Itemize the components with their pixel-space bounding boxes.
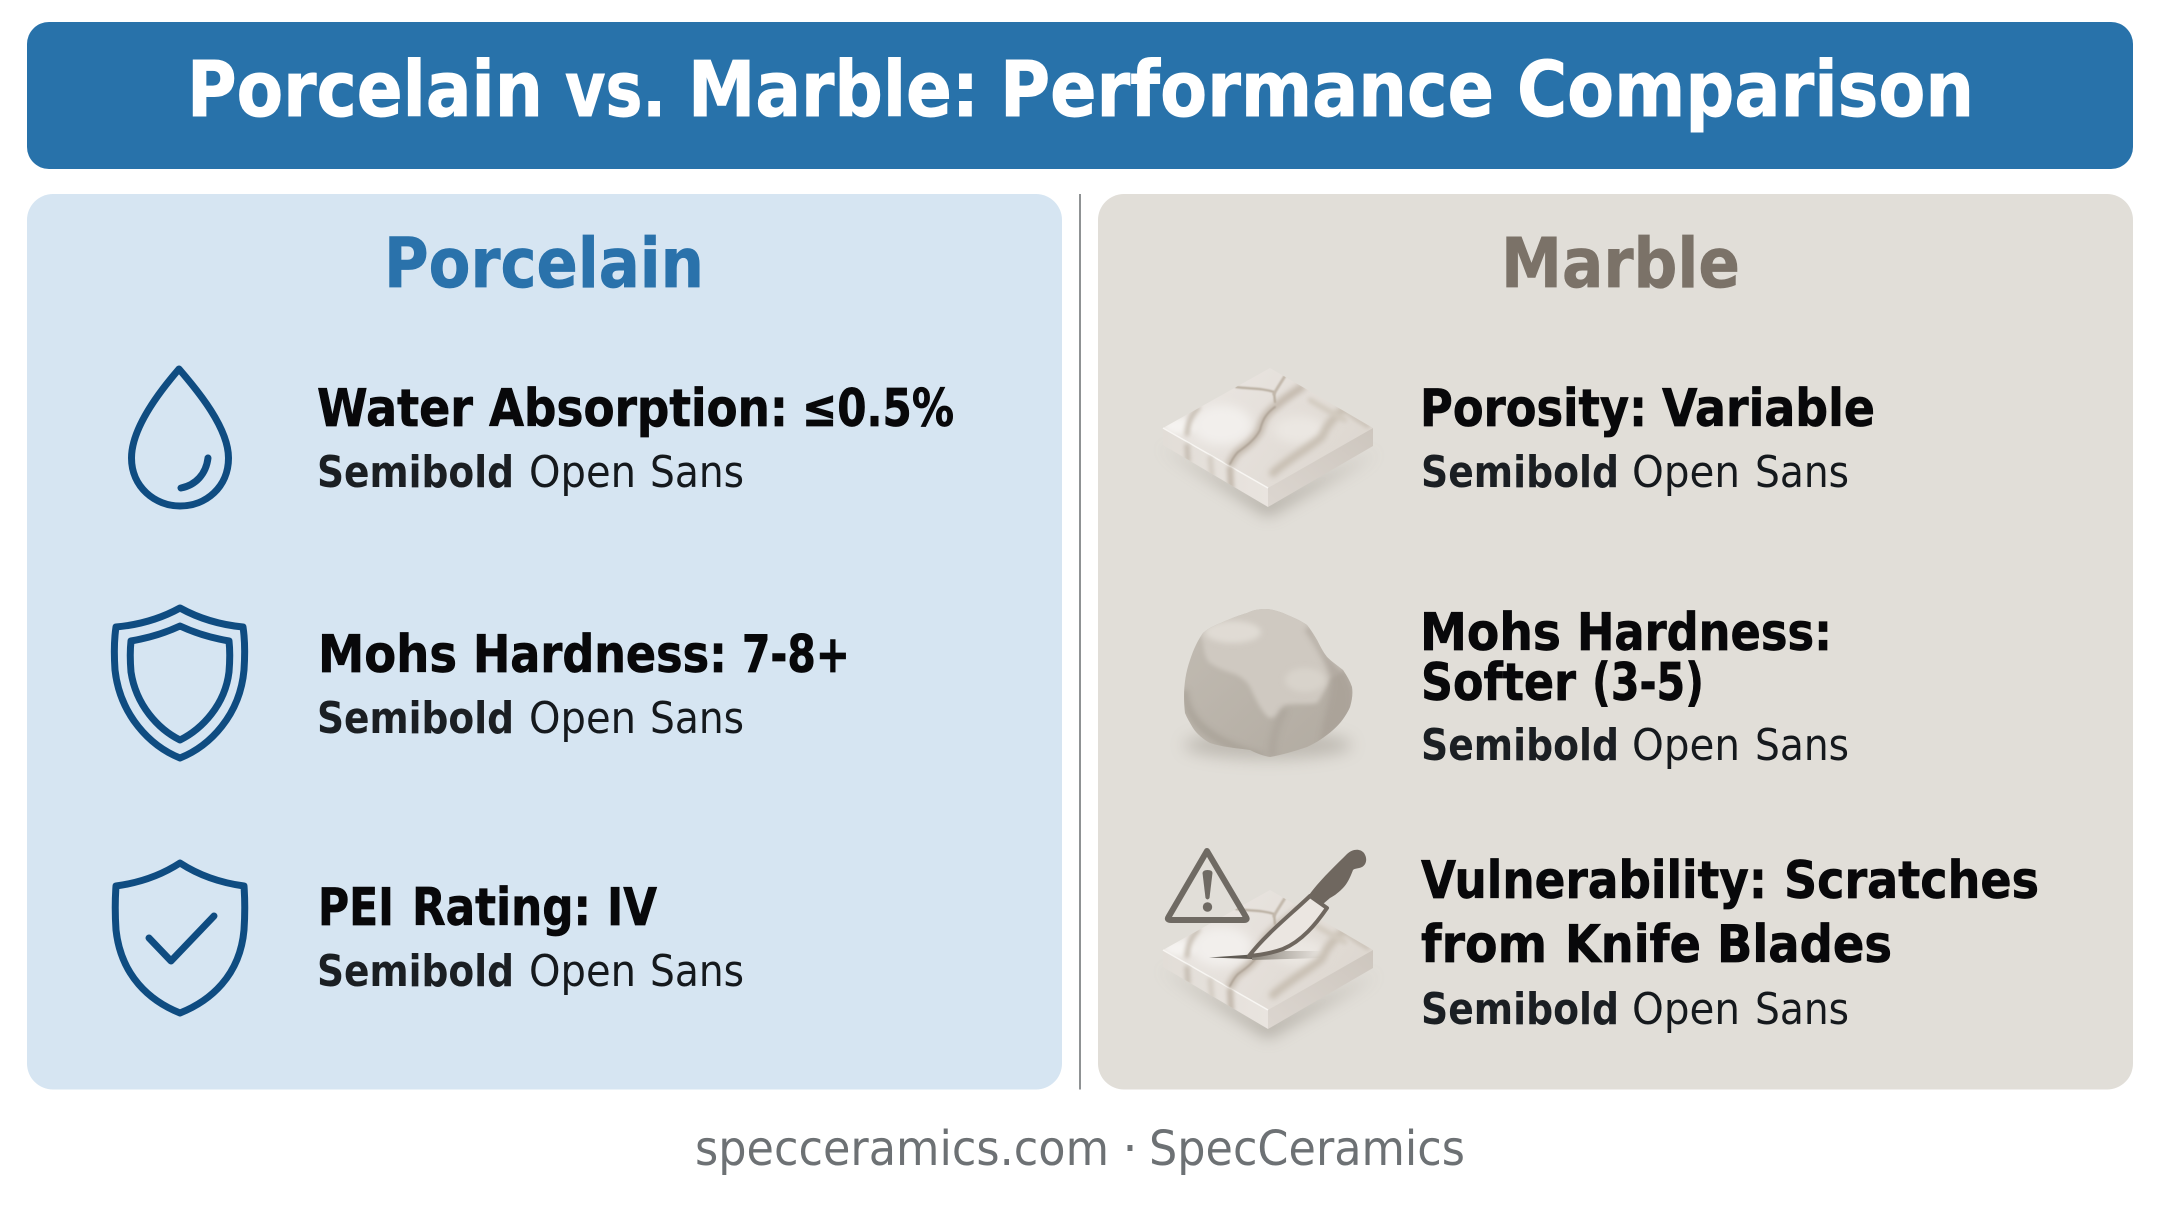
footer: SpecCeramics xyxy=(1149,1121,1465,1177)
panel: porcelain xyxy=(27,194,1062,1090)
text: mohs hardness: Open xyxy=(529,693,636,744)
text: vulnerability: Knife xyxy=(1565,915,1701,975)
text: water absorption: Open xyxy=(529,447,636,498)
text: pei rating: IV xyxy=(607,878,657,938)
text: pei rating: Semibold xyxy=(317,946,514,997)
footer xyxy=(695,1121,1465,1177)
icon: shield with check xyxy=(115,863,245,1013)
text: mohs hardness softer: (3-5) xyxy=(1592,653,1704,713)
text: vulnerability xyxy=(1421,851,2039,1035)
text: water absorption: Sans xyxy=(650,447,744,498)
text: mohs hardness: 7-8+ xyxy=(742,625,850,685)
title xyxy=(187,46,1974,135)
title: Comparison xyxy=(1517,46,1974,135)
icon: water drop xyxy=(132,369,228,506)
text: mohs hardness: Hardness: xyxy=(473,625,727,685)
text: vulnerability: from xyxy=(1421,915,1547,975)
panel: marble xyxy=(1098,194,2133,1090)
text: mohs hardness softer: Softer xyxy=(1421,653,1576,713)
text: pei rating: Open xyxy=(529,946,636,997)
title banner xyxy=(27,22,2133,169)
text: porosity xyxy=(1420,379,1875,498)
text: porosity: Variable xyxy=(1662,379,1875,439)
text: pei rating: Sans xyxy=(650,946,744,997)
text: mohs hardness softer: Hardness: xyxy=(1577,603,1832,663)
icon: scratched slab xyxy=(1160,890,1378,1038)
text: porosity: Semibold xyxy=(1421,447,1619,498)
text: pei rating: Rating: xyxy=(412,878,591,938)
icon: marble slab xyxy=(1160,368,1378,516)
text: mohs hardness softer: Sans xyxy=(1755,720,1849,771)
text: vulnerability: Open xyxy=(1632,984,1740,1035)
title: Porcelain xyxy=(187,46,543,135)
text: mohs hardness softer: Semibold xyxy=(1421,720,1619,771)
icon: soft stone xyxy=(1184,609,1352,765)
text: porosity: Porosity: xyxy=(1420,379,1647,439)
text: water absorption: Absorption: xyxy=(489,379,788,439)
text: mohs hardness: Mohs xyxy=(318,625,457,685)
text: pei rating xyxy=(317,878,744,997)
text: water absorption: Semibold xyxy=(317,447,514,498)
text: mohs hardness softer: Mohs xyxy=(1420,603,1561,663)
text: mohs hardness xyxy=(317,625,850,744)
text: pei rating: PEI xyxy=(318,878,394,938)
text: mohs hardness: Sans xyxy=(650,693,744,744)
text: vulnerability: Sans xyxy=(1755,984,1849,1035)
text: vulnerability: Blades xyxy=(1717,915,1892,975)
icon: knife scratching marble with warning xyxy=(1160,850,1378,1038)
text: vulnerability: Scratches xyxy=(1784,851,2039,911)
heading: porcelain: Porcelain xyxy=(384,224,704,304)
heading: marble: Marble xyxy=(1501,224,1740,304)
text: water absorption: ≤0.5% xyxy=(802,379,954,439)
text: porosity: Sans xyxy=(1755,447,1849,498)
text: vulnerability: Semibold xyxy=(1421,984,1619,1035)
footer: · xyxy=(1122,1121,1138,1177)
icon: double shield xyxy=(114,608,245,758)
text: water absorption: Water xyxy=(317,379,473,439)
title: Marble: xyxy=(688,46,979,135)
text: porosity: Open xyxy=(1632,447,1740,498)
icon: warning triangle xyxy=(1168,851,1247,920)
icon: scratch mark xyxy=(1209,951,1322,960)
title: Performance xyxy=(1000,46,1494,135)
text: mohs hardness softer xyxy=(1420,603,1849,771)
text: mohs hardness softer: Open xyxy=(1632,720,1740,771)
footer: specceramics.com xyxy=(695,1121,1109,1177)
text: mohs hardness: Semibold xyxy=(317,693,514,744)
text: vulnerability: Vulnerability: xyxy=(1421,851,1767,911)
icon: knife xyxy=(1249,850,1366,956)
title: vs. xyxy=(565,46,666,135)
text: water absorption xyxy=(317,379,954,498)
